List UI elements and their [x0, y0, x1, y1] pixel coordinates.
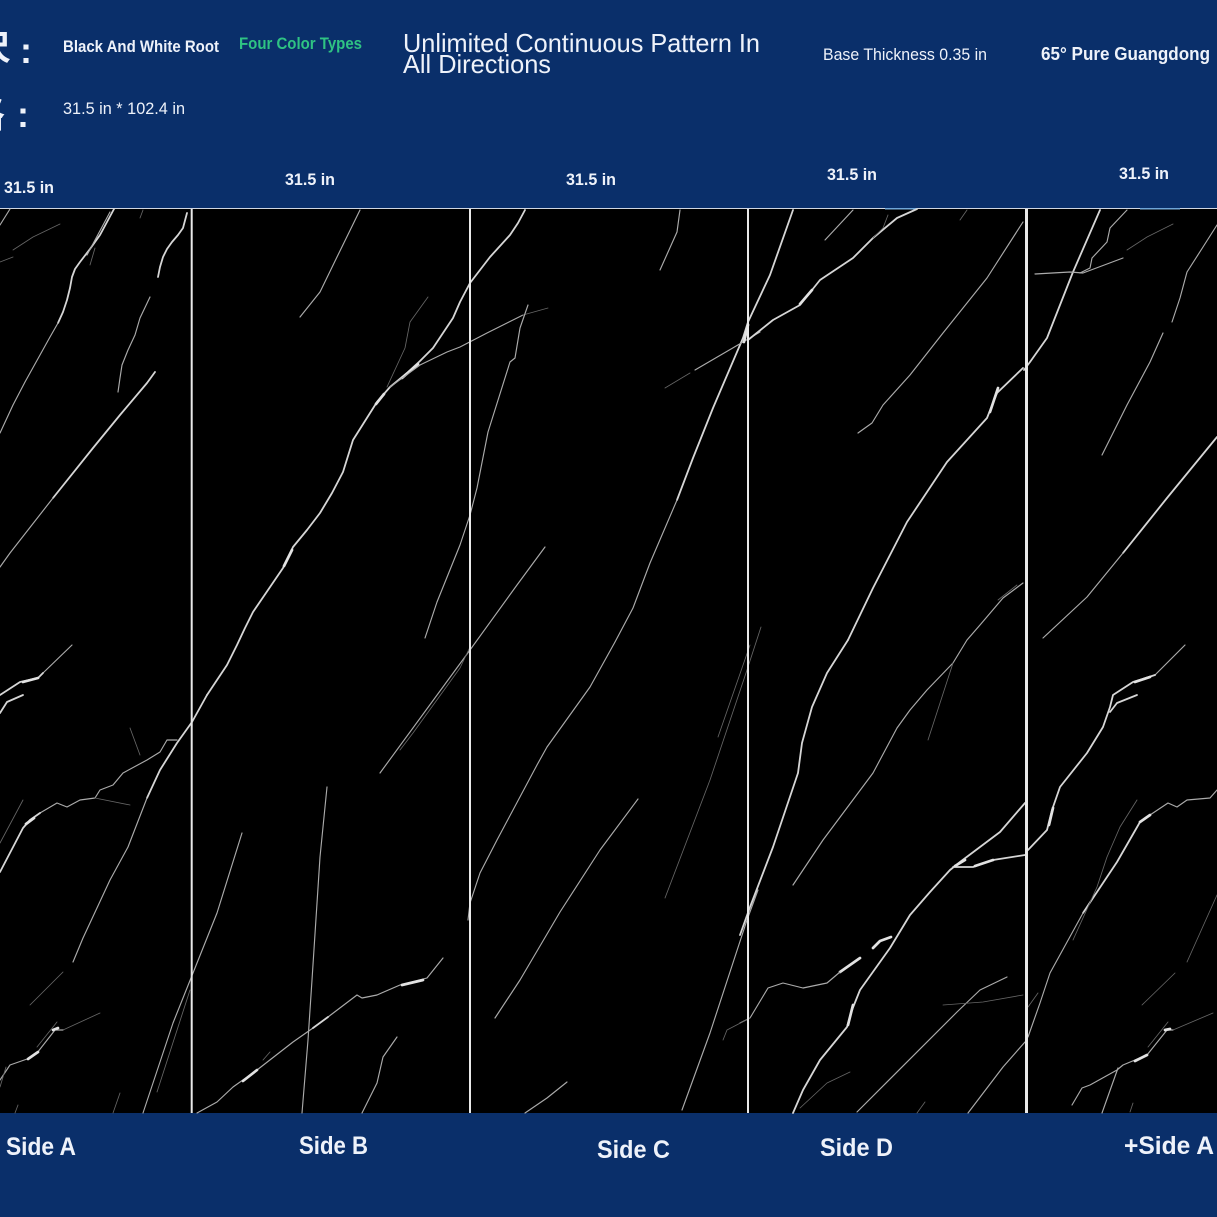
headline — [403, 28, 760, 79]
width labels: 31.5 in — [4, 179, 54, 197]
side labels: Side B — [299, 1132, 368, 1160]
cropped label: size — [0, 30, 32, 71]
width labels: 31.5 in — [827, 166, 877, 184]
width labels — [4, 165, 1169, 197]
side labels: Side A — [6, 1133, 76, 1161]
veins: side B — [143, 210, 548, 1113]
dimensions: 31.5 in * 102.4 in — [63, 100, 185, 118]
side labels: Side D — [820, 1134, 893, 1162]
headline: All Directions — [403, 49, 551, 79]
veins: side D — [723, 209, 1025, 1113]
veins: side A repeat — [1024, 210, 1217, 1113]
veins: side A — [0, 209, 207, 1113]
slab seams — [191, 209, 1028, 1113]
side labels: Side C — [597, 1136, 670, 1164]
header: spec text — [0, 28, 1210, 136]
headline: Unlimited Continuous Pattern In — [403, 28, 760, 58]
width labels: 31.5 in — [566, 171, 616, 189]
product name: Black And White Root — [63, 38, 219, 56]
width labels: 31.5 in — [285, 171, 335, 189]
width labels: 31.5 in — [1119, 165, 1169, 183]
side labels — [6, 1132, 1214, 1164]
cropped label: size: : — [20, 30, 32, 71]
color types: Four Color Types — [239, 35, 362, 53]
cropped label: format: : — [17, 94, 29, 135]
veins: side C — [468, 210, 793, 1113]
marble slab panel — [0, 208, 1217, 1113]
marble veins — [0, 209, 1217, 1113]
cropped label: format — [0, 94, 29, 136]
side labels: +Side A — [1124, 1132, 1214, 1160]
base thickness: Base Thickness 0.35 in — [823, 46, 987, 64]
